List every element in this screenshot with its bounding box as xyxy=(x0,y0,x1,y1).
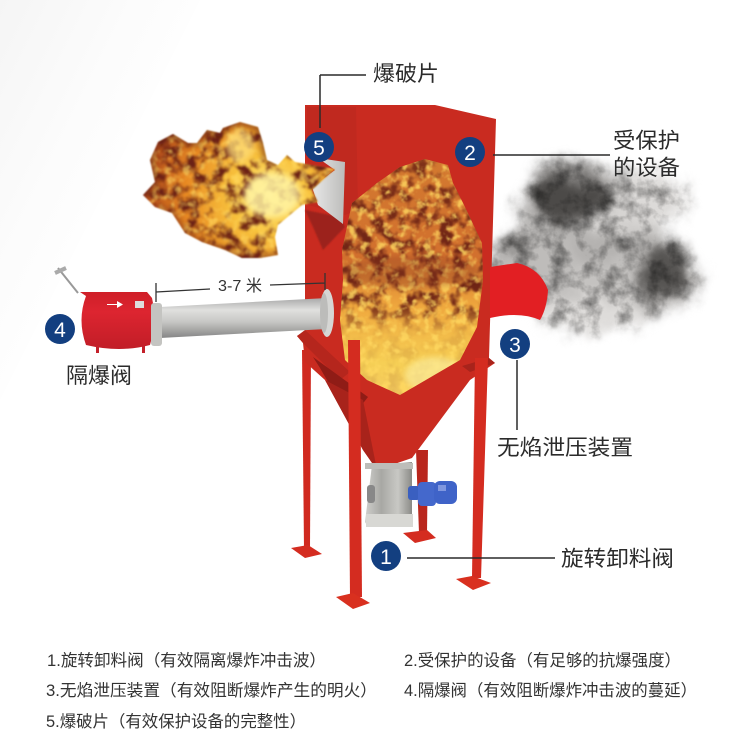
label 3: flameless vent: 无焰泄压装置 xyxy=(497,436,633,460)
legend text: 3.无焰泄压装置（有效阻断爆炸产生的明火） xyxy=(46,681,377,700)
equipment: protected device body xyxy=(297,105,496,470)
label 5: rupture disc: 5 xyxy=(313,137,325,160)
label 3: flameless vent xyxy=(497,329,633,460)
legend text: 2.受保护的设备（有足够的抗爆强度） xyxy=(404,651,681,670)
dimension: 3-7 m xyxy=(156,273,325,302)
flame window xyxy=(340,159,483,395)
arrow on valve xyxy=(107,301,123,308)
equipment: back legs xyxy=(291,350,436,558)
dimension: 3-7 m: 3-7 米 xyxy=(218,277,262,295)
label 2: protected equipment: 2 xyxy=(464,142,476,165)
legend text xyxy=(46,651,697,731)
legend text: 1.旋转卸料阀（有效隔离爆炸冲击波） xyxy=(47,651,326,670)
motor xyxy=(408,481,457,506)
label 2: protected equipment: 的设备 xyxy=(613,156,680,180)
label 1: rotary valve: 旋转卸料阀 xyxy=(561,547,674,571)
legend text: 5.爆破片（有效保护设备的完整性） xyxy=(46,712,306,731)
label 2: protected equipment xyxy=(455,129,680,180)
front legs xyxy=(336,340,491,609)
label 4: isolation valve xyxy=(45,314,132,388)
label 5: rupture disc xyxy=(304,62,439,162)
label 3: flameless vent: 3 xyxy=(509,334,521,357)
pipe with flanges xyxy=(151,289,334,346)
silver explosion vent xyxy=(305,158,345,250)
legend text: 4.隔爆阀（有效阻断爆炸冲击波的蔓延） xyxy=(404,681,697,700)
label 4: isolation valve: 隔爆阀 xyxy=(66,364,132,388)
isolation valve xyxy=(55,268,154,353)
smoke cloud xyxy=(489,160,700,333)
label 1: rotary valve: 1 xyxy=(380,546,392,569)
rotary discharge valve xyxy=(365,462,413,527)
fireball xyxy=(140,120,338,262)
label 1: rotary valve xyxy=(371,541,674,571)
label 5: rupture disc: 爆破片 xyxy=(373,62,439,86)
red outlet of flameless vent xyxy=(490,263,548,320)
label 4: isolation valve: 4 xyxy=(54,319,66,342)
label 2: protected equipment: 受保护 xyxy=(613,129,680,153)
